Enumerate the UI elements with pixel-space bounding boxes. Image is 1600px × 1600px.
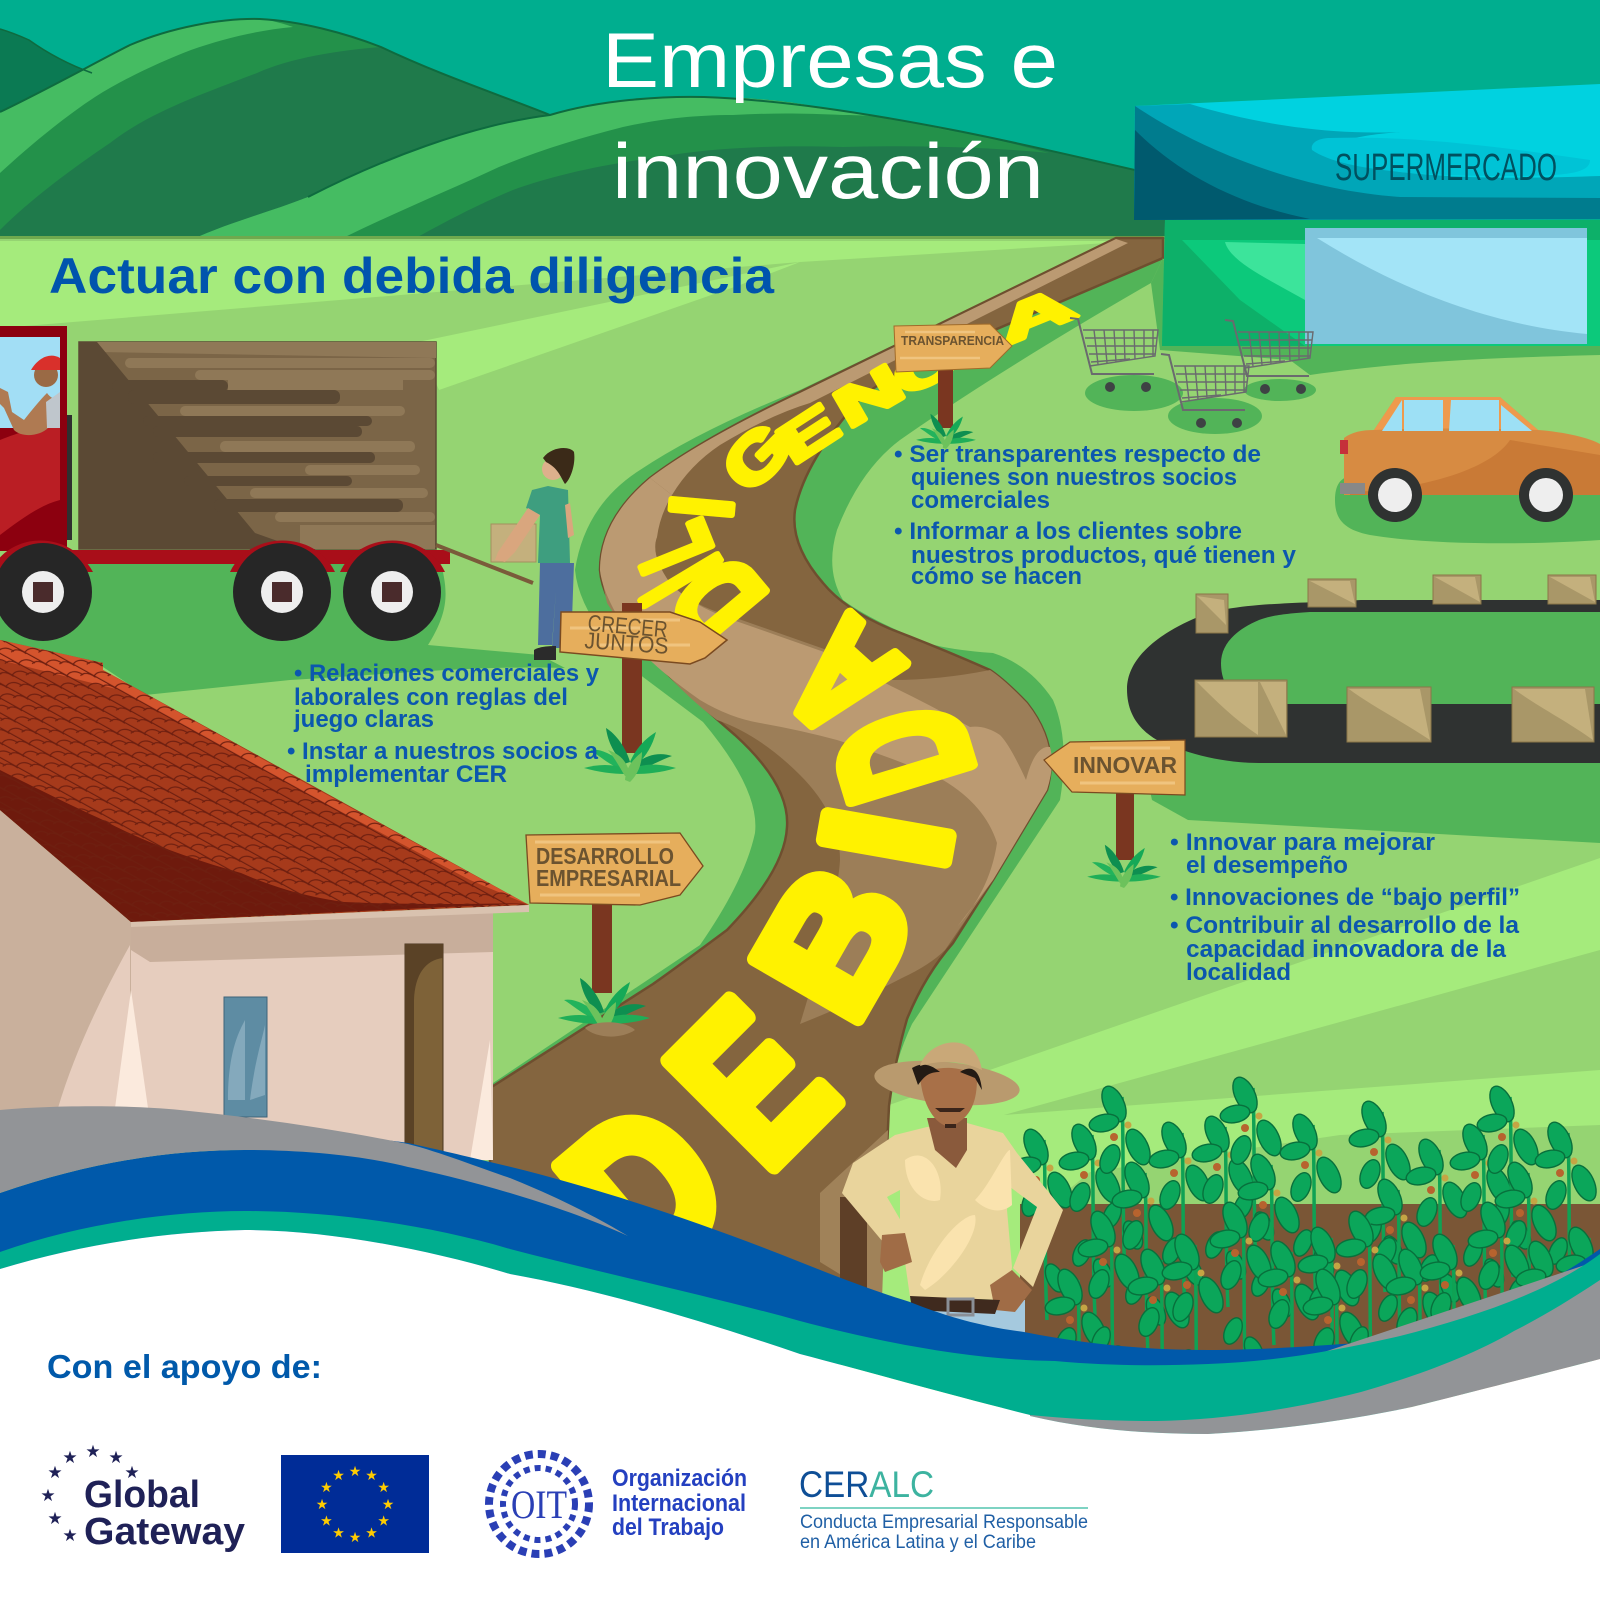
logo: eu flag: ★ [382,1496,394,1512]
logo: global gateway: ★ [62,1448,78,1467]
sign: innovar: INNOVAR [1073,752,1177,778]
text block: transparencia: cómo se hacen [911,563,1082,590]
road text: DEBIDA DILIGENCIA: E [766,391,850,476]
text block: innovar [1170,829,1520,986]
supporters heading: Con el apoyo de: [47,1348,322,1385]
text block: crecer juntos [287,660,600,788]
logo: global gateway: ★ [62,1526,78,1545]
text block: crecer juntos: implementar CER [305,761,507,788]
text block: innovar: • Innovaciones de “bajo perfil” [1170,884,1520,911]
sign: desarrollo empresarial: EMPRESARIAL [536,865,681,891]
text block: crecer juntos: • Relaciones comerciales y [294,660,600,687]
logo: oit: del Trabajo [612,1514,724,1541]
road text: DEBIDA DILIGENCIA: G [709,409,806,506]
lower wave: blue [0,1139,1600,1400]
road surface [490,238,1163,1300]
logo: ceralc: CERALC [799,1464,934,1505]
text block: innovar: • Innovar para mejorar [1170,829,1435,856]
truck [0,326,450,641]
sign: crecer juntos [560,603,727,782]
sign: crecer juntos: CRECER [587,610,669,642]
road text: DEBIDA DILIGENCIA: N [824,353,914,440]
logo: ceralc: en América Latina y el Caribe [800,1532,1036,1553]
hills [0,19,1170,240]
road text: DEBIDA DILIGENCIA: B [716,835,952,1049]
text block: crecer juntos: juego claras [293,706,434,733]
logo: eu flag: ★ [316,1496,328,1512]
logo: global gateway [40,1442,245,1553]
road light shade [600,478,1052,927]
lower wave: teal [0,1211,1600,1421]
text block: crecer juntos: • Instar a nuestros socios a [287,738,599,765]
text block: transparencia: comerciales [911,487,1050,514]
logo: eu flag: ★ [320,1512,333,1528]
roof [0,640,529,922]
road text: DEBIDA DILIGENCIA: I [783,796,990,880]
logo: eu flag: ★ [377,1512,390,1528]
logo: oit [489,1454,747,1554]
face [920,1068,977,1127]
title: Empresas e [602,16,1058,104]
jeans [930,1300,1025,1345]
text block: crecer juntos: laborales con reglas del [294,684,568,711]
logo: eu flag: ★ [349,1529,361,1545]
neck [927,1118,967,1168]
logo: ceralc: Conducta Empresarial Responsable [800,1512,1088,1533]
logo: oit: Organización [612,1465,747,1492]
shopping carts [1070,318,1316,434]
white footer [0,1230,1600,1600]
supermarket [1134,84,1600,375]
conveyor track with boxes [1127,575,1600,843]
cargo box [79,342,436,549]
road text: DEBIDA DILIGENCIA: D [520,1058,768,1319]
logo: eu flag: ★ [332,1525,345,1541]
shirt [842,1123,1063,1300]
road [490,238,1163,1300]
supermarket roof [1134,84,1600,220]
logo: eu flag [281,1455,429,1553]
road text: DEBIDA DILIGENCIA: D [643,532,790,669]
house [0,640,529,1160]
logo: eu flag: ★ [365,1525,378,1541]
crop plants [1010,1074,1600,1460]
road text: DEBIDA DILIGENCIA: A [752,587,930,771]
text block: innovar: capacidad innovadora de la [1186,936,1507,963]
hands [880,1233,912,1272]
road text: DEBIDA DILIGENCIA: C [883,328,967,408]
window [224,997,267,1117]
text block: transparencia: nuestros productos, qué tienen y [911,542,1297,569]
road text: DEBIDA DILIGENCIA: I [952,315,999,376]
text block: transparencia: • Ser transparentes respecto de [894,441,1261,468]
logo: oit: OIT [511,1482,567,1527]
logo: global gateway: ★ [47,1463,63,1482]
logo: global gateway: ★ [47,1509,63,1528]
text block: innovar: el desempeño [1186,852,1348,879]
car [1335,397,1600,543]
text block: transparencia [894,441,1297,590]
road text: DEBIDA DILIGENCIA: I [653,492,752,522]
logo: oit: Internacional [612,1490,746,1517]
road text: DEBIDA DILIGENCIA: A [989,275,1083,356]
road near farmer [820,1130,888,1300]
farmer [840,1042,1063,1345]
driver [0,388,60,435]
logo: global gateway: ★ [124,1463,140,1482]
logo: global gateway: Global [84,1474,200,1516]
logo: eu flag: ★ [349,1463,361,1479]
door [405,944,443,1159]
logo: eu flag: ★ [365,1467,378,1483]
sign: transparencia: TRANSPARENCIA [901,333,1005,348]
chassis and fenders [68,550,450,564]
woman carrying box [491,448,574,660]
text block: innovar: localidad [1186,959,1291,986]
lower wave: right grey [1000,1260,1600,1434]
hat crown [920,1042,982,1070]
logo: global gateway: ★ [108,1448,124,1467]
side wall [0,810,131,1150]
supermarket wall [1162,220,1600,346]
ramp [436,545,533,583]
road text: DEBIDA DILIGENCIA: E [628,960,875,1207]
text block: transparencia: • Informar a los clientes sobre [894,518,1242,545]
road mid shade [600,488,1051,1024]
logo: global gateway: ★ [85,1442,101,1461]
sign: desarrollo empresarial [526,833,703,1037]
supermarket window [1305,228,1587,344]
road shoulder [490,238,1163,1300]
logo: global gateway: Gateway [84,1511,245,1553]
title: innovación [612,127,1044,215]
logo: eu flag: ★ [377,1479,390,1495]
sign: transparencia [894,324,1012,449]
road text: DEBIDA DILIGENCIA: D [794,686,1010,821]
title [602,16,1058,215]
belt [910,1296,1000,1314]
road light strip [650,239,1128,495]
text block: transparencia: quienes son nuestros socios [911,464,1237,491]
lower wave: grey [0,1106,628,1236]
cab [0,326,67,551]
fence post [840,1197,867,1297]
front wall [131,912,493,1160]
logo: global gateway: ★ [40,1486,56,1505]
road text: DEBIDA DILIGENCIA: I [616,537,745,624]
road text: DEBIDA DILIGENCIA: L [613,508,735,586]
logo: eu flag: ★ [320,1479,333,1495]
sign: desarrollo empresarial: DESARROLLO [536,843,674,869]
logo: ceralc [799,1464,1088,1553]
heading: Actuar con debida diligencia [49,248,775,304]
supermarket shadow [1151,258,1600,375]
road text: DEBIDA DILIGENCIA [520,275,1083,1319]
hat brim [872,1054,1022,1112]
wheels [0,543,92,641]
sign: innovar [1044,740,1185,888]
text block: innovar: • Contribuir al desarrollo de la [1170,912,1520,939]
field [0,236,1600,1408]
sign: crecer juntos: JUNTOS [584,627,669,659]
logo: eu flag: ★ [332,1467,345,1483]
